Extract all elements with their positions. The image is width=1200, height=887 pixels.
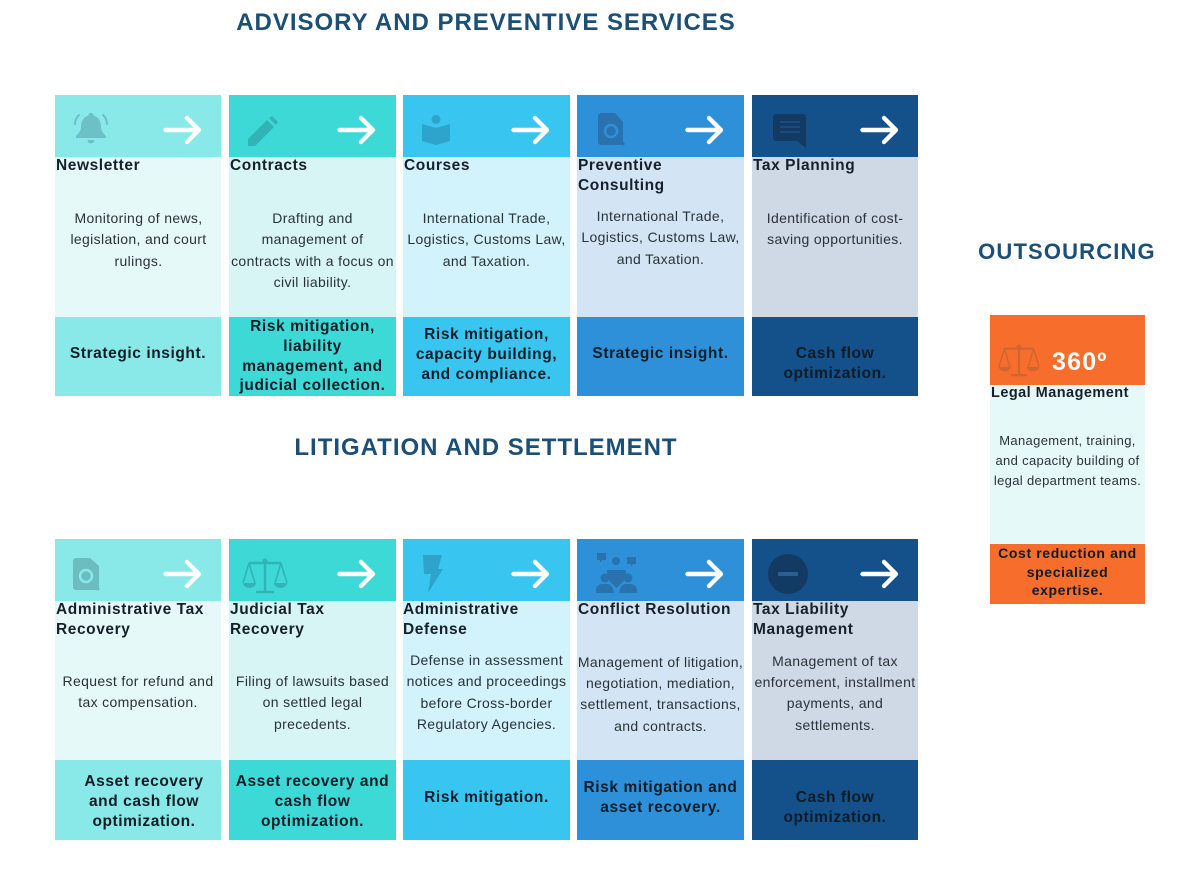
card body background	[229, 601, 396, 760]
card description: Filing of lawsuits based	[236, 673, 389, 689]
card description: before Cross-border	[421, 695, 552, 711]
card title: Newsletter	[56, 156, 140, 174]
card body background	[577, 157, 744, 317]
card: tax planning	[752, 95, 918, 396]
arrow	[163, 116, 202, 144]
card header band	[577, 539, 744, 601]
card: conflict resolution	[577, 539, 744, 840]
card description: management of	[262, 231, 363, 247]
card description: civil liability.	[274, 274, 351, 290]
card title: Tax Liability	[753, 600, 849, 618]
card description: Identification of cost-	[767, 210, 903, 226]
card description: settlements.	[795, 717, 875, 733]
card outcome	[783, 345, 887, 382]
arrow	[511, 560, 550, 588]
card outcome: expertise.	[1032, 582, 1103, 598]
card body background	[577, 601, 744, 760]
card description: enforcement, installment	[755, 674, 915, 690]
icon: lightning bolt	[423, 555, 443, 592]
card description: rulings.	[115, 253, 162, 269]
card header band	[229, 539, 396, 601]
card description: and Taxation.	[443, 253, 530, 269]
title: advisory and preventive services: ADVISORY AND PREVENTIVE SERVICES	[236, 9, 736, 36]
card title: Conflict Resolution	[578, 600, 731, 618]
card description	[767, 210, 903, 247]
card description	[236, 673, 389, 732]
arrow	[337, 560, 376, 588]
card title: Defense	[403, 620, 467, 638]
card footer band	[577, 317, 744, 396]
card outcome	[239, 318, 385, 394]
card title	[230, 600, 325, 638]
card description: settlement, transactions,	[580, 696, 741, 712]
icon: document search	[598, 113, 625, 146]
card description	[70, 210, 207, 269]
icon: scales of justice	[998, 344, 1040, 377]
card outcome: Risk mitigation.	[424, 789, 549, 806]
card description: Drafting and	[272, 210, 353, 226]
card description: negotiation, mediation,	[586, 675, 735, 691]
card footer band	[403, 760, 570, 840]
card body background	[55, 157, 221, 317]
card outcome: asset recovery.	[600, 799, 721, 816]
card description: Management of litigation,	[578, 654, 743, 670]
arrow	[685, 116, 724, 144]
card title: Recovery	[230, 620, 304, 638]
card body background	[229, 157, 396, 317]
card title: Courses	[404, 156, 470, 174]
icon: book reader	[422, 115, 450, 145]
arrow	[337, 116, 376, 144]
card description	[577, 652, 744, 737]
card description	[990, 431, 1145, 491]
card outcome: optimization.	[783, 809, 887, 826]
card: legal management	[990, 315, 1145, 604]
card footer band	[577, 760, 744, 840]
card body background	[403, 601, 570, 760]
card title: Preventive	[578, 156, 662, 174]
card description: tax compensation.	[78, 694, 198, 710]
card outcome	[236, 773, 389, 830]
card description: Regulatory Agencies.	[417, 716, 556, 732]
card header band	[229, 95, 396, 157]
card header band	[403, 539, 570, 601]
card outcome: cash flow	[275, 793, 350, 810]
card body background	[403, 157, 570, 317]
card description: payments, and	[787, 695, 883, 711]
card description	[581, 208, 740, 267]
card body background	[752, 157, 918, 317]
icon: chat bubble	[773, 114, 806, 148]
card outcome: capacity building,	[416, 346, 557, 363]
icon: document search	[73, 558, 100, 591]
card description	[63, 673, 213, 710]
card description	[403, 650, 570, 735]
card footer band	[752, 760, 918, 840]
card: judicial tax recovery	[229, 539, 396, 840]
card outcome: Cash flow	[796, 789, 874, 806]
card header band	[752, 539, 918, 601]
card outcome: Risk mitigation,	[424, 326, 549, 343]
card outcome: optimization.	[92, 813, 196, 830]
card description: and contracts.	[614, 718, 707, 734]
card outcome: liability	[283, 338, 342, 355]
card description: saving opportunities.	[767, 231, 903, 247]
card outcome: optimization.	[261, 813, 364, 830]
card footer band	[229, 760, 396, 840]
card outcome	[416, 326, 557, 383]
arrow	[860, 116, 898, 144]
card title: Judicial Tax	[230, 600, 325, 618]
card title: Contracts	[230, 156, 308, 174]
card footer band	[990, 544, 1145, 604]
card description: Logistics, Customs Law,	[581, 229, 740, 245]
card outcome: optimization.	[783, 365, 887, 382]
card title	[56, 600, 204, 638]
card outcome: Strategic insight.	[70, 345, 206, 362]
card title: Administrative	[403, 600, 519, 618]
card title: Consulting	[578, 176, 665, 194]
card outcome: judicial collection.	[240, 377, 385, 394]
arrow	[860, 559, 900, 589]
card: administrative defense	[403, 539, 570, 840]
card description: legislation, and court	[70, 231, 207, 247]
card description: Defense in assessment	[410, 652, 563, 668]
card outcome	[577, 778, 744, 818]
card title: Recovery	[56, 620, 130, 638]
card description: Management, training,	[999, 433, 1136, 448]
card outcome: Cost reduction and	[998, 545, 1137, 561]
card outcome	[752, 788, 918, 828]
card outcome: Strategic insight.	[592, 345, 729, 362]
card footer band	[752, 317, 918, 396]
card outcome: Asset recovery and	[236, 773, 389, 790]
card outcome: and compliance.	[421, 366, 552, 383]
card outcome: Cash flow	[796, 345, 874, 362]
title: outsourcing: OUTSOURCING	[978, 239, 1156, 264]
card: administrative tax recovery	[55, 539, 221, 840]
card body background	[55, 601, 221, 760]
card description: Monitoring of news,	[74, 210, 203, 226]
card: preventive consulting	[577, 95, 744, 396]
card title: Administrative Tax	[56, 600, 204, 618]
360 degree label: 360º	[1052, 348, 1108, 376]
card: newsletter	[55, 95, 221, 396]
card outcome	[990, 544, 1145, 600]
arrow	[511, 116, 550, 144]
card description: on settled legal	[263, 694, 362, 710]
card description: Logistics, Customs Law,	[407, 231, 566, 247]
card description	[231, 210, 394, 290]
card description: and capacity building of	[995, 453, 1140, 468]
card description: International Trade,	[423, 210, 550, 226]
card description: International Trade,	[597, 208, 724, 224]
card: tax liability management	[752, 539, 918, 840]
card outcome: specialized	[1027, 564, 1108, 580]
arrow	[163, 560, 202, 588]
card description: contracts with a focus on	[231, 253, 394, 269]
card header band	[752, 95, 918, 157]
card outcome: Risk mitigation,	[250, 318, 375, 335]
card outcome: Risk mitigation and	[584, 779, 737, 796]
card header band	[55, 95, 221, 157]
card footer band	[403, 317, 570, 396]
card title: Management	[753, 620, 854, 638]
card header band	[55, 539, 221, 601]
card description	[407, 210, 566, 269]
card body background	[752, 601, 918, 760]
card title	[578, 156, 665, 194]
card title: Tax Planning	[753, 156, 855, 174]
card footer band	[55, 317, 221, 396]
card outcome: and cash flow	[89, 793, 199, 810]
card header band	[403, 95, 570, 157]
card description: Management of tax	[772, 653, 898, 669]
card footer band	[55, 760, 221, 840]
card header band	[990, 315, 1145, 385]
card description	[752, 651, 918, 736]
card body background	[990, 385, 1145, 544]
card title	[403, 600, 519, 638]
card description: notices and proceedings	[407, 673, 566, 689]
icon: scales of justice	[242, 558, 288, 594]
card: contracts	[229, 95, 396, 396]
icon: bell	[74, 113, 108, 144]
card outcome: management, and	[242, 358, 383, 375]
card footer band	[229, 317, 396, 396]
title: litigation and settlement: LITIGATION AND SETTLEMENT	[294, 434, 678, 461]
card title: Legal Management	[991, 385, 1129, 401]
icon: people in discussion	[596, 553, 637, 593]
card description: precedents.	[274, 716, 351, 732]
icon: minus circle	[768, 554, 808, 594]
card header band	[577, 95, 744, 157]
card description: legal department teams.	[994, 473, 1141, 488]
arrow	[685, 559, 725, 589]
icon: pencil	[248, 116, 278, 146]
card: courses	[403, 95, 570, 396]
card description: and Taxation.	[617, 251, 704, 267]
card title	[753, 600, 854, 640]
card outcome: Asset recovery	[84, 773, 204, 790]
card outcome	[84, 773, 204, 830]
card description: Request for refund and	[63, 673, 213, 689]
